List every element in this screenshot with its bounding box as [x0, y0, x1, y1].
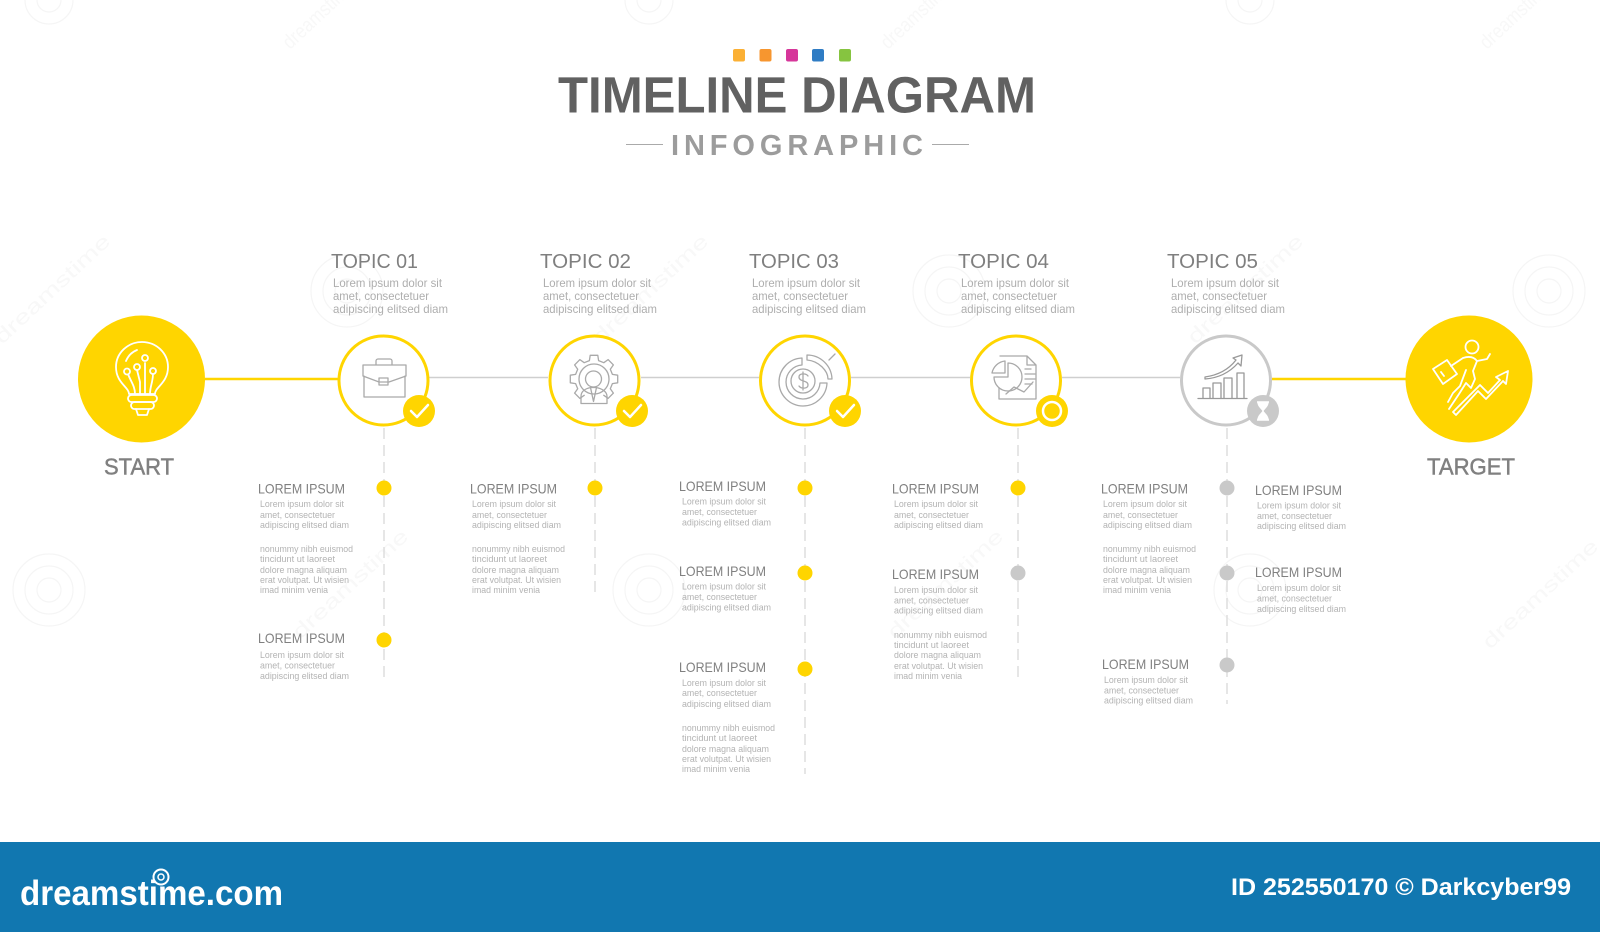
watermark layer: dreamstime [1478, 535, 1600, 654]
column 1 item 2: amet, consectetuer [260, 660, 335, 672]
target label: TARGET [1427, 454, 1515, 480]
column 1 timeline [258, 428, 392, 682]
topic 04 heading: TOPIC 04 [958, 250, 1049, 273]
icon: dollar ring chart [779, 354, 835, 406]
column 4 item 2: amet, consectetuer [894, 596, 969, 606]
column 5 item 1: nonummy nibh euismod [1103, 544, 1196, 555]
column 1 item 1: adipiscing elitsed diam [260, 520, 349, 531]
column 5 item 1: dolore magna aliquam [1103, 565, 1190, 576]
icon: report document [992, 356, 1036, 399]
column 3 item 3: Lorem ipsum dolor sit [682, 678, 766, 689]
column 4 item 2: imad minim venia [894, 671, 963, 682]
column 5 right item 1 [1255, 482, 1346, 532]
column 2 item 1: dolore magna aliquam [472, 565, 559, 576]
topic 04 heading [958, 250, 1075, 316]
column 1 item 2: LOREM IPSUM [258, 630, 345, 646]
watermark layer: dreamstime [1183, 230, 1308, 349]
column 3 item 1 [679, 478, 771, 528]
column 3 item 3: erat volutpat. Ut wisien [682, 754, 771, 765]
watermark layer: dreamstime [288, 525, 413, 644]
column 1 item 1: dolore magna aliquam [260, 565, 347, 576]
column 4 item 2: adipiscing elitsed diam [894, 606, 983, 616]
topic 02 heading: Lorem ipsum dolor sit [543, 277, 652, 290]
column 3 item 3: adipiscing elitsed diam [682, 699, 771, 710]
start node [78, 316, 205, 442]
column 4 item 2: erat volutpat. Ut wisien [894, 661, 983, 672]
column 5 item 1: amet, consectetuer [1103, 510, 1178, 521]
column 4 timeline [892, 428, 1026, 682]
topic 01 heading [331, 250, 448, 316]
column 2 item 1: LOREM IPSUM [470, 480, 557, 496]
title: TIMELINE DIAGRAM [558, 66, 1036, 124]
column 1 item 1: LOREM IPSUM [258, 480, 345, 496]
column 4 item 2: LOREM IPSUM [892, 566, 979, 582]
column 3 item 3: LOREM IPSUM [679, 659, 766, 675]
column 2 item 1: erat volutpat. Ut wisien [472, 575, 561, 586]
topic 03 heading: amet, consectetuer [752, 290, 848, 303]
topic 04 heading: adipiscing elitsed diam [961, 303, 1075, 316]
column 1 item 1: tincidunt ut laoreet [260, 554, 335, 565]
column 1 item 1: amet, consectetuer [260, 510, 335, 521]
colour squares [733, 49, 851, 62]
topic 01 node [339, 336, 435, 427]
column 2 item 1: imad minim venia [472, 585, 541, 596]
column 2 timeline [470, 428, 602, 596]
column 4 item 2: tincidunt ut laoreet [894, 640, 969, 651]
badge: in progress [1036, 395, 1068, 427]
topic 03 heading: Lorem ipsum dolor sit [752, 277, 861, 290]
column 1 item 1: Lorem ipsum dolor sit [260, 499, 344, 510]
column 5 item 2: Lorem ipsum dolor sit [1104, 675, 1188, 686]
start label: START [104, 454, 174, 480]
column 1 item 1: nonummy nibh euismod [260, 544, 353, 555]
column 5 right item 1: Lorem ipsum dolor sit [1257, 500, 1341, 512]
column 5 right item 2: adipiscing elitsed diam [1257, 604, 1346, 615]
topic 04 heading: amet, consectetuer [961, 290, 1057, 303]
column 1 item 1: imad minim venia [260, 585, 329, 596]
column 3 item 2: LOREM IPSUM [679, 563, 766, 579]
icon: gear with person [570, 355, 618, 404]
column 3 item 1: Lorem ipsum dolor sit [682, 496, 766, 508]
column 4 item 1: Lorem ipsum dolor sit [894, 499, 978, 510]
footer credit: ID 252550170 © Darkcyber99 [1231, 874, 1571, 901]
topic 05 node [1182, 336, 1279, 427]
column 5 right item 2: LOREM IPSUM [1255, 564, 1342, 580]
topic 02 heading: TOPIC 02 [540, 250, 631, 273]
topic 05 heading: amet, consectetuer [1171, 290, 1267, 303]
topic 04 node [972, 336, 1068, 427]
topic 03 heading [749, 250, 866, 316]
column 5 right item 1: amet, consectetuer [1257, 511, 1332, 522]
column 3 item 2: amet, consectetuer [682, 592, 757, 603]
column 5 item 2: adipiscing elitsed diam [1104, 696, 1193, 706]
column 3 timeline [679, 428, 812, 775]
column 5 right item 2: Lorem ipsum dolor sit [1257, 583, 1341, 594]
column 2 item 1: Lorem ipsum dolor sit [472, 499, 556, 510]
column 4 item 1: amet, consectetuer [894, 510, 969, 521]
column 2 item 1: amet, consectetuer [472, 510, 547, 521]
topic 03 node [760, 336, 861, 427]
column 5 item 1: imad minim venia [1103, 585, 1172, 596]
column 2 item 1: nonummy nibh euismod [472, 544, 565, 555]
watermark layer [0, 0, 1600, 654]
column 5 item 2: amet, consectetuer [1104, 686, 1179, 696]
column 4 item 2 [892, 566, 987, 682]
column 3 item 2 [679, 563, 771, 614]
column 4 item 2: nonummy nibh euismod [894, 630, 987, 641]
column 3 item 3: nonummy nibh euismod [682, 723, 775, 734]
column 2 item 1: tincidunt ut laoreet [472, 554, 547, 565]
topic 01 heading: adipiscing elitsed diam [333, 303, 448, 316]
badge: done [829, 395, 861, 427]
column 3 item 3: imad minim venia [682, 764, 751, 775]
column 5 right item 2: amet, consectetuer [1257, 594, 1332, 604]
watermark layer: dreamstime [588, 230, 713, 349]
column 5 right item 2 [1255, 564, 1346, 615]
column 3 item 1: LOREM IPSUM [679, 478, 766, 494]
column 3 item 1: amet, consectetuer [682, 507, 757, 518]
column 3 item 3: amet, consectetuer [682, 688, 757, 699]
badge: done [616, 395, 648, 427]
column 1 item 1 [258, 480, 353, 596]
topic 05 heading: TOPIC 05 [1167, 250, 1258, 273]
column 5 item 1 [1101, 480, 1196, 596]
badge: done [403, 395, 435, 427]
topic 04 heading: Lorem ipsum dolor sit [961, 277, 1070, 290]
topic 01 heading: amet, consectetuer [333, 290, 429, 303]
column 5 item 1: Lorem ipsum dolor sit [1103, 499, 1187, 510]
column 4 item 1: adipiscing elitsed diam [894, 520, 983, 531]
column 5 item 1: adipiscing elitsed diam [1103, 520, 1192, 531]
badge: pending hourglass [1247, 395, 1279, 427]
column 4 item 2: Lorem ipsum dolor sit [894, 585, 978, 596]
column 4 item 1: LOREM IPSUM [892, 480, 979, 496]
column 3 item 3: dolore magna aliquam [682, 744, 769, 755]
column 3 item 2: Lorem ipsum dolor sit [682, 582, 766, 592]
footer bar [0, 842, 1600, 932]
column 5 timeline [1101, 428, 1346, 706]
column 3 item 3: tincidunt ut laoreet [682, 733, 757, 744]
topic 02 heading [540, 250, 657, 316]
column 4 item 1 [892, 480, 983, 531]
footer logo: dreamstime.com [20, 874, 283, 913]
topic 02 node [550, 336, 648, 427]
column 4 item 2: dolore magna aliquam [894, 650, 981, 661]
column 5 right item 1: adipiscing elitsed diam [1257, 521, 1346, 532]
topic 05 heading [1167, 250, 1285, 316]
column 3 item 2: adipiscing elitsed diam [682, 602, 771, 614]
column 5 item 1: LOREM IPSUM [1101, 480, 1188, 496]
column 3 item 3 [679, 659, 775, 775]
icon: light bulb [116, 342, 168, 415]
topic 05 heading: adipiscing elitsed diam [1171, 303, 1285, 316]
topic 03 heading: adipiscing elitsed diam [752, 303, 866, 316]
column 2 item 1: adipiscing elitsed diam [472, 520, 561, 531]
topic 02 heading: adipiscing elitsed diam [543, 303, 657, 316]
watermark layer: dreamstime [883, 525, 1008, 644]
column 1 item 2: adipiscing elitsed diam [260, 671, 349, 682]
column 5 item 2 [1102, 656, 1193, 706]
topic 02 heading: amet, consectetuer [543, 290, 639, 303]
column 2 item 1 [470, 480, 565, 596]
topic 01 heading: Lorem ipsum dolor sit [333, 277, 443, 290]
topic 01 heading: TOPIC 01 [331, 250, 418, 273]
column 3 item 1: adipiscing elitsed diam [682, 518, 771, 528]
topic 03 heading: TOPIC 03 [749, 250, 839, 273]
icon: climbing businessman [1433, 340, 1508, 415]
topic 05 heading: Lorem ipsum dolor sit [1171, 277, 1280, 290]
column 1 item 1: erat volutpat. Ut wisien [260, 575, 349, 586]
column 5 right item 1: LOREM IPSUM [1255, 482, 1342, 498]
timeline connector lines [205, 378, 1406, 379]
subtitle: INFOGRAPHIC [671, 130, 923, 162]
column 5 item 1: erat volutpat. Ut wisien [1103, 575, 1192, 586]
column 1 item 2: Lorem ipsum dolor sit [260, 650, 344, 661]
icon: growth bar chart [1198, 355, 1247, 398]
column 1 item 2 [258, 630, 349, 682]
target node [1406, 316, 1532, 442]
column 5 item 1: tincidunt ut laoreet [1103, 554, 1178, 565]
column 5 item 2: LOREM IPSUM [1102, 656, 1189, 672]
icon: briefcase [363, 359, 406, 397]
